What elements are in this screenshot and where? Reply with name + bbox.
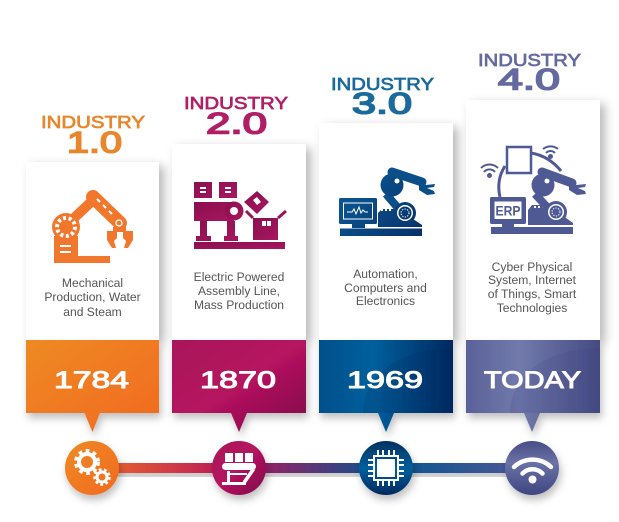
heading: Industry 3.0: INDUSTRY bbox=[331, 74, 434, 94]
heading: Industry 3.0 bbox=[331, 74, 434, 120]
description: Mass Production bbox=[194, 298, 284, 312]
description: Electric Powered bbox=[194, 270, 284, 284]
card body bbox=[466, 100, 600, 340]
description: Computers and bbox=[344, 281, 427, 295]
icon: orange robot arm bbox=[52, 197, 133, 263]
year band: 1969 bbox=[319, 340, 453, 432]
icon: wifi bbox=[514, 460, 551, 484]
description: Assembly Line, bbox=[198, 284, 280, 298]
description bbox=[344, 267, 427, 308]
card body bbox=[26, 162, 159, 340]
icon: conveyor belt bbox=[222, 453, 256, 485]
heading: Industry 4.0 bbox=[478, 50, 581, 96]
year band: 1784: 1784 bbox=[54, 367, 129, 394]
heading: Industry 1.0: INDUSTRY bbox=[41, 112, 145, 132]
year band: 1784 bbox=[26, 340, 159, 432]
year band: Today bbox=[466, 340, 600, 432]
heading: Industry 2.0: INDUSTRY bbox=[184, 93, 288, 113]
icon: wifi signal right bbox=[543, 146, 558, 158]
description bbox=[488, 260, 577, 315]
panel: Industry 2.0 bbox=[172, 93, 306, 432]
description: Technologies bbox=[497, 301, 567, 315]
timeline connector bbox=[92, 463, 532, 473]
description: Cyber Physical bbox=[492, 260, 572, 274]
panel: Industry 1.0 bbox=[26, 112, 159, 432]
icon: ERP system, tablet and robot arm: ERP bbox=[496, 202, 520, 218]
description: Mechanical bbox=[62, 276, 123, 290]
description: and Steam bbox=[63, 305, 122, 319]
description: Electronics bbox=[356, 294, 415, 308]
icon: ERP system, tablet and robot arm bbox=[481, 146, 586, 234]
description bbox=[44, 276, 141, 319]
card body bbox=[172, 144, 306, 340]
description: System, Internet bbox=[488, 273, 577, 287]
heading: Industry 4.0: 4.0 bbox=[498, 64, 560, 96]
icon: assembly line machine bbox=[194, 182, 286, 249]
timeline node: gears bbox=[65, 441, 119, 495]
icon: wifi signal left bbox=[481, 164, 498, 177]
card body bbox=[319, 123, 453, 340]
icon: gears bbox=[76, 450, 110, 484]
year band: Today: TODAY bbox=[484, 367, 581, 394]
panel: Industry 3.0 bbox=[319, 74, 453, 432]
heading: Industry 2.0 bbox=[184, 93, 288, 140]
description: Production, Water bbox=[44, 290, 141, 304]
heading: Industry 1.0 bbox=[41, 112, 145, 160]
timeline node: wifi bbox=[505, 441, 559, 495]
icon: computer and robot arm bbox=[339, 172, 435, 236]
year band: 1870 bbox=[172, 340, 306, 432]
icon: microchip bbox=[368, 450, 404, 486]
panel: Industry 4.0 bbox=[466, 50, 600, 432]
description: of Things, Smart bbox=[488, 287, 577, 301]
description bbox=[194, 270, 284, 312]
heading: Industry 1.0: 1.0 bbox=[67, 126, 122, 160]
description: Automation, bbox=[353, 267, 418, 281]
year band: 1969: 1969 bbox=[347, 367, 423, 394]
timeline node: microchip bbox=[359, 441, 413, 495]
timeline node: conveyor bbox=[212, 441, 266, 495]
heading: Industry 3.0: 3.0 bbox=[352, 88, 412, 120]
heading: Industry 2.0: 2.0 bbox=[206, 108, 267, 140]
year band: 1870: 1870 bbox=[200, 367, 276, 394]
heading: Industry 4.0: INDUSTRY bbox=[478, 50, 581, 70]
